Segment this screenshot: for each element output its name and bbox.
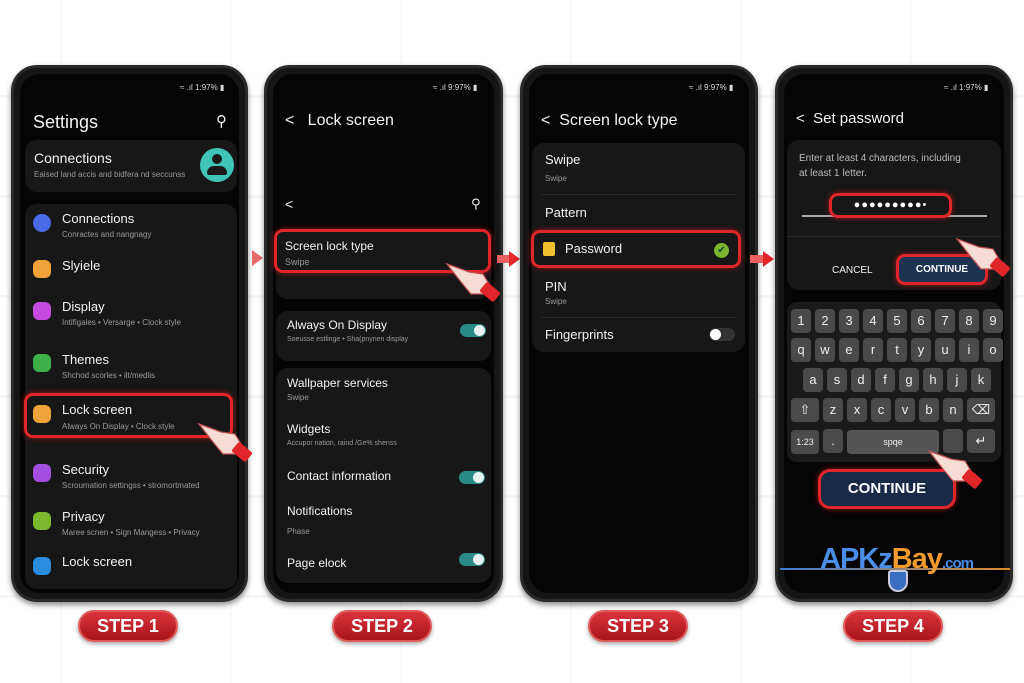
keyboard [787, 302, 1001, 462]
list: settings items: Maree scnen • Sign Mangess • Privacy [62, 528, 200, 537]
heading: Set password: < Set password [796, 110, 904, 127]
button: continue small: CONTINUE [916, 264, 968, 275]
keyboard: f [883, 372, 887, 387]
phone 4: set password [775, 65, 1013, 602]
phone 2: lock screen: Notifications [287, 504, 352, 518]
phone 2: lock screen: Always On Display [287, 318, 387, 332]
keyboard: o [989, 342, 997, 357]
list: settings items: Security [62, 462, 109, 477]
highlight: password: Password [565, 241, 622, 256]
keyboard: h [929, 372, 937, 387]
keyboard: n [949, 402, 957, 417]
highlight: screen lock type: Swipe [285, 257, 310, 267]
phone 2: lock screen: Swipe [287, 393, 309, 402]
icon: avatar [200, 148, 234, 182]
phone 2: lock screen: Soeusse estlinge • Sha(pnynen display [287, 336, 408, 343]
highlight: screen lock type [274, 229, 491, 273]
phone 2: lock screen: Accupor nation, raind /Ge% shenss [287, 440, 397, 447]
keyboard: . [831, 433, 835, 448]
status bar: ≈ .ıl 9:97% ▮ [689, 83, 733, 92]
card: lock options: Swipe [545, 297, 567, 306]
card: password entry: CANCEL [832, 265, 873, 276]
icon: lock [543, 242, 555, 256]
phone 2: lock screen: Page elock [287, 556, 346, 570]
text: STEP 3 [607, 616, 669, 636]
card: screen lock type [276, 229, 491, 299]
list: settings items: Privacy [62, 509, 105, 524]
status bar: ≈ .ıl 9:97% ▮ [433, 83, 477, 92]
highlight: screen lock type: Screen lock type [285, 239, 374, 253]
step badges [78, 610, 178, 642]
heading: Settings: Settings [33, 112, 98, 132]
keyboard: 6 [917, 313, 925, 328]
card: lock options: Fingerprints [545, 327, 614, 342]
highlight: lock screen [24, 393, 233, 438]
keyboard: j [956, 372, 958, 387]
card: lock options: Swipe [545, 152, 580, 167]
keyboard: 1:23 [796, 437, 814, 447]
step badges: STEP 1 [97, 616, 159, 636]
card: profile: Connections [34, 150, 112, 166]
button: continue large: CONTINUE [848, 480, 926, 497]
keyboard: y [918, 342, 924, 357]
keyboard: s [834, 372, 840, 387]
password field [829, 193, 952, 218]
keyboard: z [830, 402, 836, 417]
keyboard: u [941, 342, 949, 357]
list: settings items: Display [62, 299, 105, 314]
list: settings items: Scroumation settingss • stromortmated [62, 481, 200, 490]
icon: shield [888, 570, 908, 592]
button: continue large [818, 469, 956, 509]
icon: hand 3 [955, 238, 1010, 277]
keyboard: 1 [797, 313, 805, 328]
keyboard: i [968, 342, 970, 357]
card: password entry [787, 140, 1001, 290]
keyboard: ↵ [976, 433, 986, 448]
heading: Lock screen: < Lock screen [285, 112, 394, 129]
card: password entry: at least 1 letter. [799, 168, 867, 179]
card: password entry: Enter at least 4 characters, including [799, 153, 961, 164]
list: settings items: Connections [62, 211, 134, 226]
logo: APKzBay: APKzBay.com [820, 543, 973, 575]
phone 2: lock screen: Wallpaper services [287, 376, 388, 390]
keyboard: c [878, 402, 884, 417]
keyboard: v [902, 402, 908, 417]
phone 2: lock screen: Phase [287, 527, 310, 536]
keyboard: x [854, 402, 860, 417]
keyboard: k [978, 372, 984, 387]
keyboard: 4 [869, 313, 877, 328]
list: settings items: Intifigales • Versarge • Clock style [62, 318, 181, 327]
keyboard: r [871, 342, 875, 357]
keyboard: a [809, 372, 817, 387]
phone 3: screen lock type [520, 65, 758, 602]
keyboard: 2 [821, 313, 829, 328]
list: settings items: Lock screen [62, 554, 132, 569]
keyboard: t [895, 342, 899, 357]
arrow 3 [750, 255, 763, 263]
card: lock options [532, 143, 745, 352]
keyboard: w [820, 342, 830, 357]
keyboard: b [925, 402, 933, 417]
keyboard: 8 [965, 313, 973, 328]
keyboard: spqe [883, 437, 903, 447]
arrow 1 [252, 250, 263, 266]
password field: ●●●●●●●●●• [854, 199, 927, 211]
icon: check [714, 243, 729, 258]
keyboard: 5 [893, 313, 901, 328]
keyboard: 9 [989, 313, 997, 328]
keyboard: d [857, 372, 865, 387]
card: profile [25, 140, 237, 192]
list: settings items: Conractes and nangnagy [62, 230, 151, 239]
keyboard: g [905, 372, 913, 387]
phone 2: lock screen: < [285, 196, 293, 212]
icon: hand 4 [927, 450, 982, 489]
list: settings items: Lock screen [62, 402, 132, 417]
card: lock options: Pattern [545, 205, 587, 220]
phone 2: lock screen: ⚲ [471, 196, 481, 211]
phone 2: lock screen [264, 65, 503, 602]
phone 2: lock screen: Contact information [287, 469, 391, 483]
heading: Screen lock type: < Screen lock type [541, 112, 678, 129]
list: settings items: Themes [62, 352, 109, 367]
status bar: ≈ .ıl 1:97% ▮ [180, 83, 224, 92]
keyboard: e [845, 342, 853, 357]
highlight: password [531, 230, 741, 268]
icon: hand 2 [445, 262, 500, 302]
button: continue small [896, 254, 988, 285]
icon: search: ⚲ [216, 113, 227, 130]
phone 2: lock screen: Widgets [287, 422, 330, 436]
icon: hand 1 [197, 422, 252, 462]
list: settings items: Slyiele [62, 258, 100, 273]
text: STEP 2 [351, 616, 413, 636]
keyboard: ⌫ [972, 402, 990, 417]
logo: APKzBay [780, 543, 1010, 592]
list: settings items: Shchod scorles • ilt/medlis [62, 371, 155, 380]
list: settings items [25, 204, 237, 589]
keyboard: q [797, 342, 805, 357]
keyboard: ⇧ [800, 402, 810, 417]
list: settings items: Always On Display • Clock style [62, 422, 175, 431]
keyboard: 3 [845, 313, 853, 328]
arrow 2 [497, 255, 509, 263]
status bar: ≈ .ıl 1:97% ▮ [944, 83, 988, 92]
icon: check: ✔ [717, 245, 726, 256]
phone 1: settings [11, 65, 248, 602]
card: lock options: PIN [545, 279, 567, 294]
text: STEP 4 [862, 616, 924, 636]
card: settings list [276, 311, 491, 361]
card: profile: Eaised land accis and bidfera nd seccunss [34, 170, 185, 179]
card: lock options: Swipe [545, 174, 567, 183]
keyboard: 7 [941, 313, 949, 328]
